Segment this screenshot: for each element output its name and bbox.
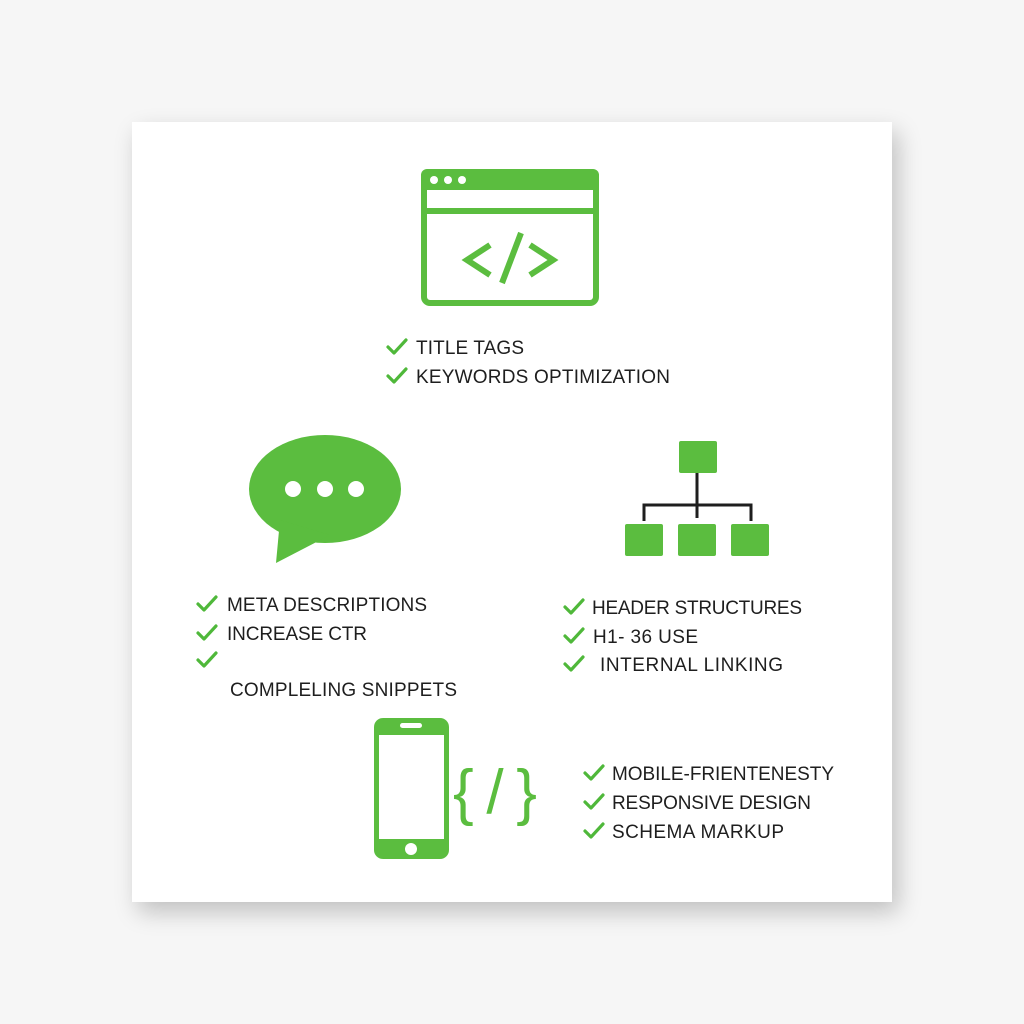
list: header structures: INTERNAL LINKING [600,655,783,676]
icon: browser window with code [421,169,599,303]
icon: hierarchy [625,441,769,556]
icon: speech bubble [249,435,401,563]
list: title tags [388,338,670,388]
card panel [132,122,892,902]
list: mobile friendliness: RESPONSIVE DESIGN [612,793,811,814]
list: title tags: KEYWORDS OPTIMIZATION [416,367,670,388]
list: header structures: HEADER STRUCTURES [592,598,802,619]
list: header structures: H1- 36 USE [593,627,698,648]
list: mobile friendliness [585,764,834,843]
icon: mobile phone with code braces: {/} [453,758,537,827]
list: mobile friendliness: MOBILE-FRIENTENESTY [612,764,834,785]
list: meta descriptions: COMPLELING SNIPPETS [230,680,457,701]
list: title tags: TITLE TAGS [416,338,524,359]
list: meta descriptions [198,595,457,701]
list: meta descriptions: META DESCRIPTIONS [227,595,427,616]
list: header structures [565,598,802,676]
list: mobile friendliness: SCHEMA MARKUP [612,822,784,843]
icon: mobile phone with code braces [374,718,537,859]
list: meta descriptions: INCREASE CTR [227,624,367,645]
